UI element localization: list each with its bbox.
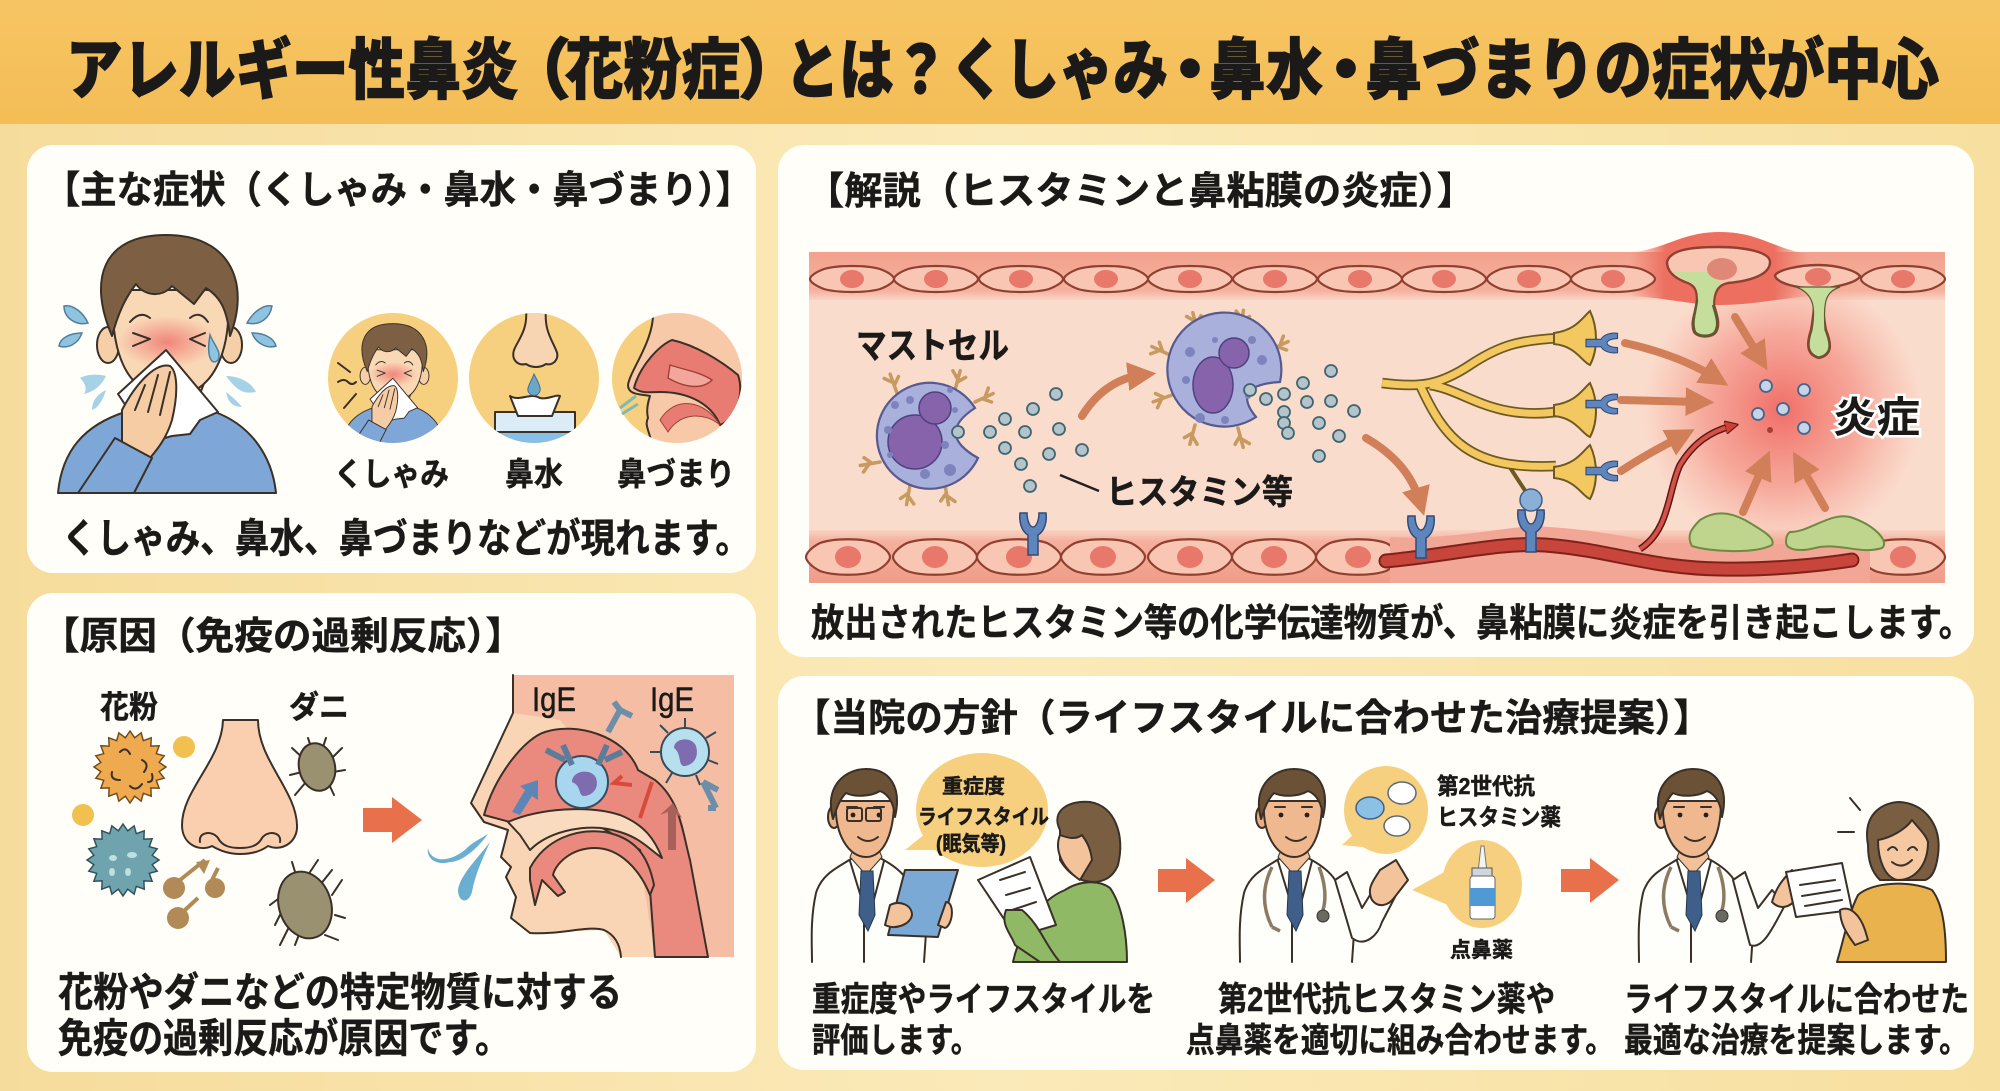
doctor hands	[885, 902, 952, 928]
illustration: head cross-section	[471, 675, 734, 957]
title	[66, 33, 1939, 107]
nasal cavity and throat	[484, 729, 708, 957]
blue clipboard	[888, 870, 958, 937]
step 1 text: 評価します。	[812, 1022, 979, 1060]
step 3 text	[1624, 981, 1969, 1060]
icon: spores	[163, 860, 225, 929]
nerve fibers	[1382, 311, 1596, 499]
illustration: nose	[182, 720, 297, 854]
title: （	[505, 33, 571, 107]
arrows to inflammation	[1621, 317, 1825, 512]
receptors on nerve	[1586, 333, 1618, 481]
icon: large mite	[270, 860, 345, 945]
speech bubble: nasal spray	[1412, 840, 1522, 928]
title: アレルギー性鼻炎	[66, 33, 518, 107]
arrow: step 2 to 3	[1561, 858, 1619, 903]
icon: runny nose circle	[469, 310, 599, 452]
panel: cause	[27, 593, 756, 1072]
label: sneeze: くしゃみ	[334, 456, 449, 492]
histamine in inflammation	[1752, 380, 1810, 434]
goblet cell with mucus	[1667, 247, 1770, 336]
histamine particles	[952, 365, 1360, 492]
label: congestion: 鼻づまり	[617, 456, 735, 492]
step 2 text	[1186, 981, 1614, 1060]
icon: orange pollen	[72, 731, 195, 826]
patient	[978, 802, 1127, 962]
icon: sneezing circle	[328, 313, 458, 446]
blood vessel	[1386, 545, 1852, 569]
label: pollen: 花粉	[100, 690, 158, 725]
doctor arm and hand	[1733, 872, 1785, 946]
title: ・	[1313, 33, 1379, 107]
arrow: to head	[363, 797, 422, 843]
arrow: step 1 to 2	[1158, 858, 1215, 903]
step 3 illustration	[1639, 769, 1946, 962]
arrow: mast cell activation	[1082, 375, 1142, 416]
step 1 text	[812, 981, 1155, 1060]
panel: clinic policy	[778, 676, 1974, 1070]
second immune cell	[650, 718, 718, 785]
title banner	[0, 0, 2000, 124]
speech bubble: severity: 重症度	[942, 775, 1005, 798]
speech bubble: severity: (眠気等)	[936, 833, 1006, 856]
palate	[508, 809, 662, 858]
blue immune cell	[546, 745, 622, 808]
illustration: sneezing man	[58, 235, 276, 493]
patient woman	[1786, 798, 1946, 962]
heading: explanation: 【解説（ヒスタミンと鼻粘膜の炎症）】	[806, 171, 1475, 213]
tongue arc	[530, 831, 654, 905]
top epithelial cells	[810, 266, 1655, 292]
heading: cause: 【原因（免疫の過剰反応）】	[41, 616, 524, 658]
label: runny nose: 鼻水	[505, 456, 563, 492]
title: とは？	[785, 33, 948, 107]
arrow: histamine to receptor	[1366, 438, 1420, 502]
mast cell 1	[859, 369, 996, 506]
speech bubble: tablets	[1342, 766, 1428, 854]
label: second-generation antihistamine: 第2世代抗	[1437, 773, 1535, 799]
step 2 text: 点鼻薬を適切に組み合わせます。	[1186, 1022, 1614, 1060]
cause text: 花粉やダニなどの特定物質に対する	[58, 971, 622, 1015]
step 2 illustration	[1240, 766, 1561, 962]
label: mites: ダニ	[289, 690, 349, 725]
blue and red mini arrows	[512, 780, 538, 815]
heading: main symptoms: 【主な症状（くしゃみ・鼻水・鼻づまり）】	[44, 170, 752, 212]
icon: teal pollen	[87, 824, 159, 896]
green cells	[1690, 513, 1773, 551]
label: second-generation antihistamine: ヒスタミン薬	[1437, 804, 1561, 830]
icon: small mite	[290, 738, 345, 795]
title: ・	[1157, 33, 1223, 107]
step 2 text: 第2世代抗ヒスタミン薬や	[1218, 981, 1555, 1019]
diagram: nasal mucosa	[806, 232, 1945, 583]
step 1 text: 重症度やライフスタイルを	[812, 981, 1155, 1019]
symptoms text: くしゃみ、鼻水、鼻づまりなどが現れます。	[62, 517, 750, 561]
heading: clinic policy: 【当院の方針（ライフスタイルに合わせた治療提案）】	[793, 698, 1711, 740]
panel: main symptoms	[27, 145, 756, 573]
bottom epithelial cells	[806, 539, 1945, 575]
panel: explanation	[778, 145, 1974, 657]
icon: sneeze spray	[428, 834, 490, 900]
icon: blocked nose circle	[612, 310, 745, 445]
label: mast cell: マストセル	[856, 325, 1009, 366]
antibodies	[608, 702, 718, 808]
label: IgE 2: IgE	[650, 681, 694, 719]
title: ）	[738, 33, 804, 107]
step 1 illustration	[812, 753, 1127, 962]
title: 鼻水	[1209, 33, 1323, 107]
submucosal tissue	[1390, 526, 1870, 583]
cause text: 免疫の過剰反応が原因です。	[58, 1017, 510, 1061]
label: second-generation antihistamine	[1437, 773, 1561, 830]
receptors on epithelium	[1020, 489, 1544, 558]
label: histamine: ヒスタミン等	[1106, 474, 1293, 512]
label: IgE: IgE	[532, 681, 576, 719]
red arrow	[1640, 426, 1732, 549]
speech bubble: severity: ライフスタイル	[918, 806, 1049, 829]
doctor with glasses	[812, 769, 926, 962]
doctor arm and hand	[1335, 872, 1395, 942]
cause text	[58, 971, 622, 1061]
label: inflammation: 炎症	[1833, 394, 1920, 441]
title: くしゃみ	[950, 33, 1168, 107]
cell with mucus drip	[1775, 265, 1860, 358]
mast cell 2	[1149, 309, 1291, 449]
title: 花粉症	[565, 33, 740, 107]
speech bubble: severity	[905, 753, 1049, 867]
label: nasal spray: 点鼻薬	[1450, 939, 1513, 962]
leader line	[1060, 475, 1099, 491]
